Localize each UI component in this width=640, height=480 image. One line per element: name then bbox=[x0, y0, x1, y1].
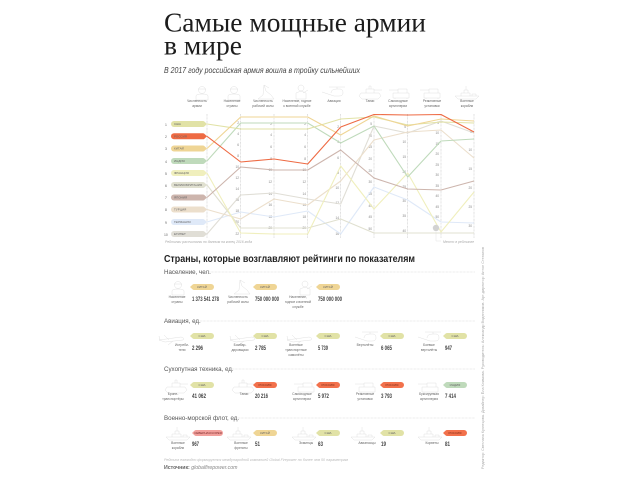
item: population of country: КИТАЙ bbox=[197, 285, 207, 289]
section heading: Страны, которые возглавляют рейтинги по показателям bbox=[164, 254, 415, 265]
item: carriers: США bbox=[389, 431, 395, 435]
axes with ticks: 6 bbox=[337, 156, 339, 160]
item: carriers bbox=[351, 427, 404, 448]
axes with ticks: 8 bbox=[304, 157, 306, 161]
chart note: Рейтинги рассчитаны по данным на конец 2016 года bbox=[165, 240, 252, 244]
item: warships: 967 bbox=[192, 441, 199, 448]
item: transports: США bbox=[325, 334, 331, 338]
column icons and headers: установки bbox=[424, 104, 440, 108]
column icons and headers: Население, годное bbox=[283, 99, 312, 103]
item: workforce bbox=[227, 280, 279, 304]
column icons and headers: Реактивные bbox=[423, 99, 441, 103]
item: attack helicopters: США bbox=[452, 334, 458, 338]
axes with ticks: 6 bbox=[304, 145, 306, 149]
item: transports: 5 739 bbox=[318, 345, 328, 352]
country labels: 8 bbox=[165, 208, 167, 212]
country labels: ТУРЦИЯ bbox=[174, 208, 186, 212]
axes with ticks: 40 bbox=[402, 229, 406, 233]
footnote: Рейтинг ежегодно формируется международной компанией Global Firepower по более чем 50 параметрам bbox=[164, 458, 349, 462]
country labels: 4 bbox=[165, 160, 167, 164]
country labels: 1 bbox=[165, 123, 167, 127]
item: towed artillery: ИНДИЯ bbox=[450, 383, 460, 387]
item: tanks: РОССИЯ bbox=[259, 383, 271, 387]
axes with ticks: 20 bbox=[268, 226, 272, 230]
axes with ticks: 12 bbox=[335, 201, 339, 205]
axes with ticks: 20 bbox=[402, 170, 406, 174]
axes with ticks: 15 bbox=[435, 142, 439, 146]
axes with ticks: 14 bbox=[335, 216, 339, 220]
line: USA bbox=[207, 117, 474, 129]
axes with ticks: 30 bbox=[435, 173, 439, 177]
item: tanks: Танки bbox=[240, 392, 249, 396]
item: rocket launchers: РОССИЯ bbox=[386, 383, 398, 387]
item: population of country: Население bbox=[169, 295, 186, 299]
line: Egypt bbox=[207, 121, 474, 234]
axes with ticks: 25 bbox=[435, 163, 439, 167]
axes with ticks: 50 bbox=[435, 215, 439, 219]
item: rocket launchers: 3 793 bbox=[381, 393, 392, 400]
column icons and headers: рабочей силы bbox=[252, 104, 274, 108]
country labels: ФРАНЦИЯ bbox=[174, 171, 189, 175]
item: bombers: 2 785 bbox=[255, 345, 266, 352]
item: transports: Военные bbox=[289, 343, 303, 347]
item: carriers: 19 bbox=[381, 441, 386, 448]
country labels: 7 bbox=[165, 196, 167, 200]
axes with ticks: 22 bbox=[235, 232, 239, 236]
column icons and headers: корабли bbox=[461, 104, 473, 108]
country labels: 10 bbox=[164, 233, 168, 237]
item: towed artillery bbox=[418, 382, 467, 401]
axes with ticks: 2 bbox=[337, 125, 339, 129]
title second line: в мире bbox=[164, 30, 242, 60]
country labels: ИНДИЯ bbox=[174, 159, 185, 163]
axes with ticks: 40 bbox=[368, 204, 372, 208]
column icons and headers: Военные bbox=[460, 99, 474, 103]
column icons and headers: Самоходные bbox=[388, 99, 408, 103]
item: rocket launchers: Реактивные bbox=[356, 392, 374, 396]
item: transports bbox=[285, 333, 340, 357]
item: population of country: страны bbox=[171, 300, 183, 304]
axes with ticks: 12 bbox=[235, 176, 239, 180]
item: fit for service: 750 000 000 bbox=[318, 296, 342, 303]
country labels: КИТАЙ bbox=[174, 146, 184, 150]
panel: ranking chart bbox=[164, 85, 479, 244]
axes with ticks: 20 bbox=[302, 226, 306, 230]
column icons and headers: Население bbox=[224, 99, 241, 103]
item: attack helicopters: 947 bbox=[445, 345, 452, 352]
axes with ticks: 20 bbox=[435, 152, 439, 156]
axes with ticks: 4 bbox=[337, 140, 339, 144]
axes with ticks: 30 bbox=[402, 199, 406, 203]
item: attack helicopters: вертолёты bbox=[421, 348, 438, 352]
item: transports: транспортные bbox=[285, 348, 307, 352]
rank marker bbox=[433, 225, 439, 231]
item: fit for service: годное к военной bbox=[285, 300, 311, 304]
axes with ticks: 25 bbox=[368, 169, 372, 173]
axes with ticks: 35 bbox=[435, 184, 439, 188]
item: warships bbox=[166, 427, 223, 450]
item: corvettes bbox=[418, 427, 467, 448]
axes with ticks: 30 bbox=[368, 180, 372, 184]
line: Russia bbox=[207, 114, 474, 164]
item: frigates bbox=[227, 427, 277, 450]
item: frigates: Военные bbox=[234, 441, 248, 445]
axes with ticks: 10 bbox=[435, 131, 439, 135]
axes with ticks: 15 bbox=[402, 155, 406, 159]
item: fighters: 2 296 bbox=[192, 345, 203, 352]
axes with ticks: 20 bbox=[468, 186, 472, 190]
line: Germany bbox=[207, 187, 474, 234]
axes with ticks: 45 bbox=[368, 215, 372, 219]
axes with ticks: 5 bbox=[404, 125, 406, 129]
item: frigates: КИТАЙ bbox=[260, 431, 270, 435]
axes with ticks: 4 bbox=[304, 133, 306, 137]
item: rocket launchers: установки bbox=[357, 397, 373, 401]
country labels: 5 bbox=[165, 172, 167, 176]
axes with ticks: 10 bbox=[235, 165, 239, 169]
item: bombers bbox=[230, 333, 277, 352]
axes with ticks: 4 bbox=[237, 132, 239, 136]
item: frigates: 51 bbox=[255, 441, 260, 448]
item: fighters: тели bbox=[179, 348, 186, 352]
title: Самые мощные армии bbox=[164, 8, 426, 38]
item: fighters bbox=[159, 333, 214, 352]
item: towed artillery: Буксируемая bbox=[419, 392, 439, 396]
axes with ticks: 18 bbox=[268, 215, 272, 219]
item: helicopters bbox=[355, 332, 404, 352]
item: warships: СЕВЕРНАЯ КОРЕЯ bbox=[194, 431, 222, 435]
axes with ticks bbox=[207, 114, 474, 238]
column icons and headers bbox=[187, 85, 479, 108]
column icons and headers: страны bbox=[226, 104, 238, 108]
item: armored carriers bbox=[162, 380, 214, 401]
item: population of country bbox=[169, 282, 219, 304]
axes with ticks: 14 bbox=[268, 192, 272, 196]
axes with ticks: 15 bbox=[368, 145, 372, 149]
axes with ticks: 5 bbox=[370, 122, 372, 126]
item: attack helicopters: Боевые bbox=[423, 343, 435, 347]
item: helicopters: США bbox=[389, 334, 395, 338]
item: tanks: 20 216 bbox=[255, 393, 268, 400]
line: France bbox=[207, 166, 474, 234]
axes with ticks: 16 bbox=[235, 198, 239, 202]
axes with ticks: 16 bbox=[268, 203, 272, 207]
item: armored carriers: 41 062 bbox=[192, 393, 206, 400]
item: helicopters: Вертолёты bbox=[357, 343, 374, 347]
item: corvettes: РОССИЯ bbox=[449, 431, 461, 435]
axes with ticks: 12 bbox=[268, 180, 272, 184]
axes with ticks: 8 bbox=[270, 157, 272, 161]
item: tanks bbox=[232, 380, 277, 400]
axes with ticks: 10 bbox=[268, 168, 272, 172]
item: bombers: США bbox=[262, 334, 268, 338]
item: fit for service: службе bbox=[292, 305, 304, 309]
item: bombers: Бомбар- bbox=[234, 343, 246, 347]
country labels: 9 bbox=[165, 221, 167, 225]
country labels: 3 bbox=[165, 147, 167, 151]
item: self-propelled: РОССИЯ bbox=[322, 383, 334, 387]
axes with ticks: 16 bbox=[335, 232, 339, 236]
axes with ticks: 14 bbox=[235, 187, 239, 191]
item: frigates: фрегаты bbox=[234, 446, 248, 450]
axes with ticks: 35 bbox=[402, 214, 406, 218]
item: transports: самолёты bbox=[288, 353, 304, 357]
country labels: ГЕРМАНИЯ bbox=[174, 220, 191, 224]
panel: ground vehicles bbox=[162, 366, 475, 401]
item: workforce: Численность bbox=[228, 295, 248, 299]
item: destroyers bbox=[292, 427, 340, 448]
item: self-propelled bbox=[292, 382, 340, 401]
axes with ticks: 8 bbox=[237, 154, 239, 158]
item: armored carriers: транспортёры bbox=[162, 397, 184, 401]
axes with ticks: 20 bbox=[368, 157, 372, 161]
item: fighters: Истреби- bbox=[175, 343, 189, 347]
item: workforce: рабочей силы bbox=[227, 300, 249, 304]
axes with ticks: 14 bbox=[302, 192, 306, 196]
axis note: Место в рейтинге bbox=[443, 240, 474, 244]
item: fighters: США bbox=[199, 334, 205, 338]
panel: population bbox=[164, 269, 475, 309]
panel: navy bbox=[164, 415, 475, 450]
axes with ticks: 5 bbox=[437, 121, 439, 125]
axes with ticks: 2 bbox=[237, 121, 239, 125]
axes with ticks: 6 bbox=[237, 143, 239, 147]
item: destroyers: 63 bbox=[318, 441, 323, 448]
axes with ticks: 2 bbox=[270, 122, 272, 126]
country labels: США bbox=[174, 122, 181, 126]
line: India bbox=[207, 123, 474, 177]
item: fit for service bbox=[285, 281, 342, 309]
axes with ticks: 10 bbox=[335, 186, 339, 190]
item: workforce: КИТАЙ bbox=[260, 285, 270, 289]
axes with ticks: 45 bbox=[435, 205, 439, 209]
column icons and headers: Танки bbox=[366, 99, 375, 103]
country labels: 6 bbox=[165, 184, 167, 188]
item: destroyers: США bbox=[325, 431, 331, 435]
axes with ticks: 18 bbox=[235, 209, 239, 213]
heading: navy: Военно-морской флот, ед. bbox=[164, 415, 239, 422]
axes with ticks: 20 bbox=[235, 220, 239, 224]
axes with ticks: 12 bbox=[302, 180, 306, 184]
axes with ticks: 18 bbox=[302, 215, 306, 219]
axes with ticks: 30 bbox=[468, 224, 472, 228]
line: China bbox=[207, 116, 474, 148]
axes with ticks: 35 bbox=[368, 192, 372, 196]
item: armored carriers: Броне- bbox=[168, 392, 178, 396]
item: workforce: 750 000 000 bbox=[255, 296, 279, 303]
item: rocket launchers bbox=[355, 382, 404, 401]
axes with ticks: 6 bbox=[270, 145, 272, 149]
line: Turkey bbox=[207, 130, 474, 219]
column icons and headers: артиллерии bbox=[389, 104, 407, 108]
axes with ticks: 25 bbox=[402, 185, 406, 189]
axes with ticks: 5 bbox=[470, 130, 472, 134]
item: self-propelled: артиллерии bbox=[293, 397, 311, 401]
heading: population: Население, чел. bbox=[164, 269, 211, 276]
country labels: ЕГИПЕТ bbox=[174, 232, 186, 236]
item: fit for service: Население, bbox=[289, 295, 307, 299]
axes with ticks: 10 bbox=[368, 134, 372, 138]
column icons and headers: Авиация bbox=[327, 99, 341, 103]
item: towed artillery: 7 414 bbox=[445, 393, 456, 400]
item: self-propelled: 5 972 bbox=[318, 393, 329, 400]
item: helicopters: 6 065 bbox=[381, 345, 392, 352]
heading: aviation: Авиация, ед. bbox=[164, 318, 201, 325]
item: armored carriers: США bbox=[199, 383, 205, 387]
heading: ground vehicles: Сухопутная техника, ед. bbox=[164, 366, 234, 373]
axes with ticks: 10 bbox=[402, 140, 406, 144]
country labels: ВЕЛИКОБРИТАНИЯ bbox=[174, 183, 202, 187]
item: warships: корабли bbox=[172, 446, 184, 450]
column icons and headers: к военной службе bbox=[283, 104, 311, 108]
axes with ticks: 50 bbox=[368, 227, 372, 231]
country labels: 2 bbox=[165, 135, 167, 139]
item: bombers: дировщики bbox=[231, 348, 249, 352]
country labels: РОССИЯ bbox=[174, 134, 187, 138]
axes with ticks: 2 bbox=[304, 122, 306, 126]
item: fit for service: КИТАЙ bbox=[323, 285, 333, 289]
axes with ticks: 4 bbox=[270, 133, 272, 137]
panel: aviation bbox=[159, 318, 475, 357]
country labels bbox=[164, 121, 207, 237]
item: population of country: 1 373 541 278 bbox=[192, 296, 219, 303]
item: destroyers: Эсминцы bbox=[299, 441, 314, 445]
item: towed artillery: артиллерия bbox=[420, 397, 438, 401]
item: attack helicopters bbox=[418, 332, 467, 352]
column icons and headers: армии bbox=[192, 104, 202, 108]
axes with ticks: 10 bbox=[468, 148, 472, 152]
source: Источник: globalfirepower.com bbox=[164, 465, 238, 471]
item: warships: Военные bbox=[171, 441, 185, 445]
subtitle: В 2017 году российская армия вошла в тройку сильнейших bbox=[164, 65, 361, 75]
axes with ticks: 10 bbox=[302, 168, 306, 172]
item: corvettes: 81 bbox=[445, 441, 450, 448]
axes with ticks: 15 bbox=[468, 167, 472, 171]
country labels: ЯПОНИЯ bbox=[174, 196, 187, 200]
item: corvettes: Корветы bbox=[426, 441, 439, 445]
axes with ticks: 25 bbox=[468, 205, 472, 209]
column icons and headers: Численность bbox=[187, 99, 207, 103]
line: UK bbox=[207, 185, 474, 233]
column icons and headers: Численность bbox=[253, 99, 273, 103]
item: carriers: Авианосцы bbox=[358, 441, 376, 445]
axes with ticks: 8 bbox=[337, 171, 339, 175]
line: Japan bbox=[207, 150, 474, 198]
item: self-propelled: Самоходные bbox=[292, 392, 312, 396]
axes with ticks: 16 bbox=[302, 203, 306, 207]
axes with ticks: 40 bbox=[435, 194, 439, 198]
credits: Редактор: Светлана Кузнецова. Дизайнер: Ёла Климова. Руководитель: Александр Воденников. Арт-директор: Антон Степанов bbox=[481, 247, 485, 469]
